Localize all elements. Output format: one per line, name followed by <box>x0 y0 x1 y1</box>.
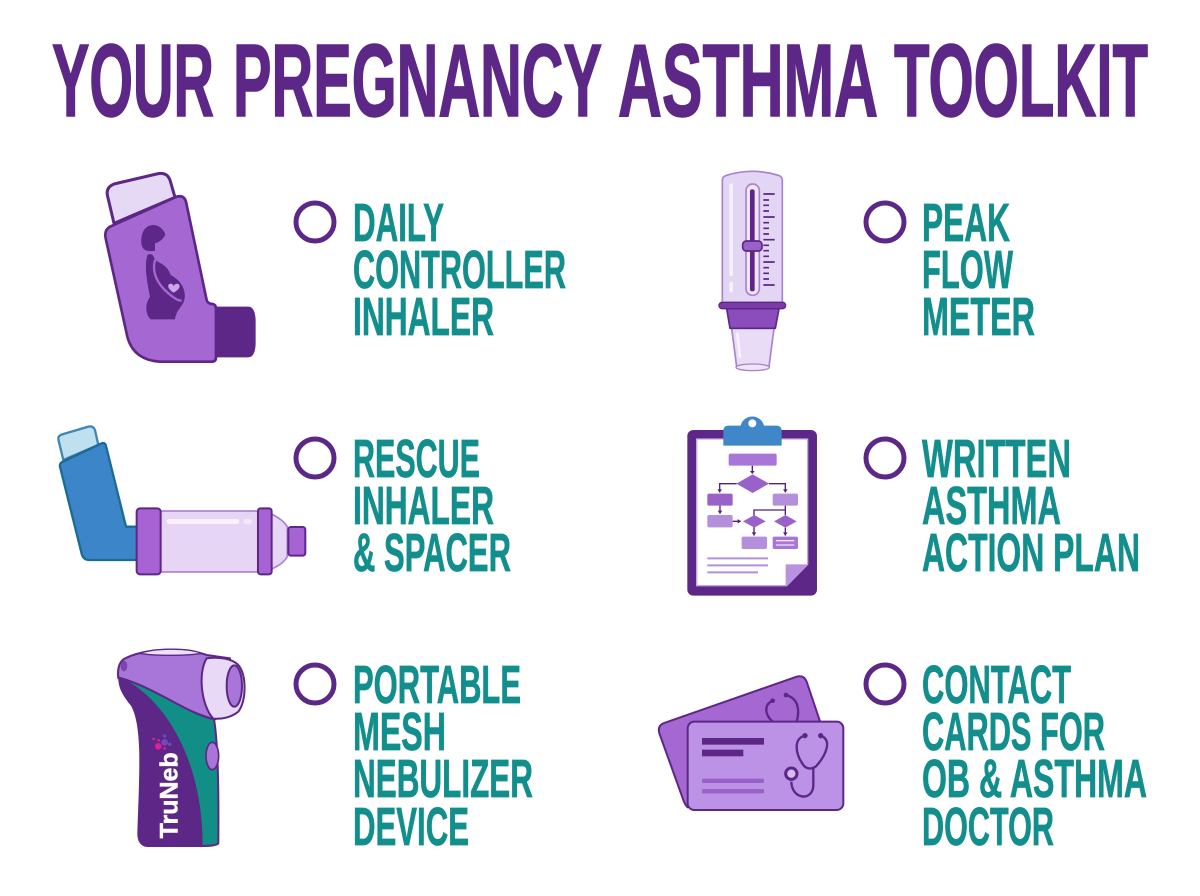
label: INHALER <box>353 476 494 536</box>
icon: contact cards with stethoscope <box>659 676 843 810</box>
checkbox circle <box>866 439 904 477</box>
label: PEAK <box>922 193 1010 253</box>
checkbox circle <box>866 665 904 703</box>
icon: pregnant woman silhouette <box>141 225 185 319</box>
label <box>353 429 511 583</box>
label <box>922 193 1035 347</box>
checkbox circle <box>866 203 904 241</box>
label: NEBULIZER <box>353 749 533 809</box>
title: ASTHMA <box>618 23 878 138</box>
label: DOCTOR <box>922 797 1054 857</box>
title <box>52 23 1148 138</box>
label: CONTACT <box>922 655 1071 715</box>
label: DEVICE <box>353 797 469 857</box>
panel: rescue inhaler and spacer <box>58 426 511 583</box>
icon: blue inhaler with spacer <box>58 426 305 574</box>
TruNeb brand text: TruNeb <box>156 752 184 838</box>
label <box>922 429 1140 583</box>
title: PREGNANCY <box>233 23 602 138</box>
label: PORTABLE <box>353 655 521 715</box>
panel: daily controller inhaler <box>105 173 566 362</box>
label <box>922 655 1147 857</box>
label: ASTHMA <box>922 476 1061 536</box>
label: RESCUE <box>353 429 480 489</box>
label: CONTROLLER <box>353 240 566 300</box>
checkbox circle <box>296 665 334 703</box>
label: DAILY <box>353 193 444 253</box>
label: WRITTEN <box>922 429 1071 489</box>
label <box>353 193 566 347</box>
title: YOUR <box>52 23 214 138</box>
label <box>353 655 533 857</box>
icon: clipboard with flowchart <box>687 416 817 596</box>
label: MESH <box>353 702 446 762</box>
icon: TruNeb nebulizer <box>118 649 245 846</box>
icon: purple inhaler with pregnant silhouette <box>105 173 256 362</box>
panel: portable mesh nebulizer device <box>118 649 533 857</box>
checkbox circle <box>296 439 334 477</box>
checkbox circle <box>296 203 334 241</box>
label: & SPACER <box>353 523 511 583</box>
label: FLOW <box>922 240 1013 300</box>
icon: peak flow meter <box>719 171 786 371</box>
panel: contact cards for OB and asthma doctor <box>659 655 1147 857</box>
panel: peak flow meter <box>719 171 1035 371</box>
label: METER <box>922 287 1035 347</box>
panel: written asthma action plan <box>687 416 1140 596</box>
label: INHALER <box>353 287 494 347</box>
